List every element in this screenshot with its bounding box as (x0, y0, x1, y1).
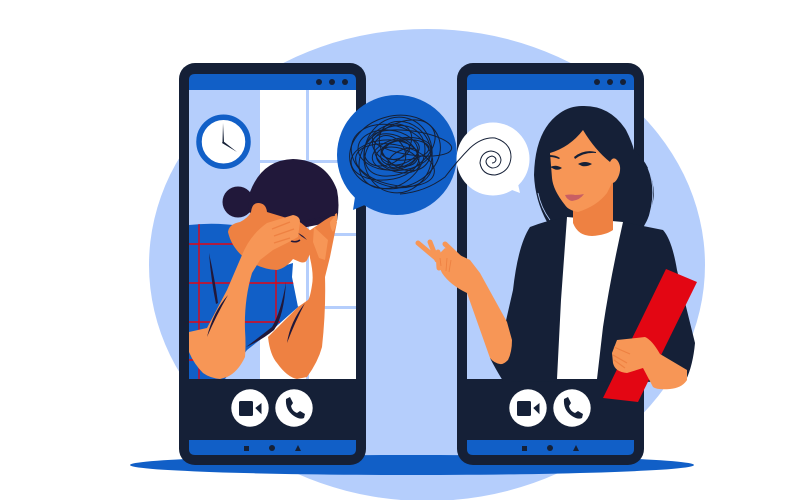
nav icons (244, 445, 301, 451)
person: therapist (418, 106, 697, 402)
finger lines (440, 258, 451, 272)
video button (231, 389, 269, 427)
window (260, 90, 356, 379)
eyes (550, 162, 592, 170)
status dots (316, 79, 348, 85)
ground shadow (130, 455, 694, 475)
call button (553, 389, 591, 427)
white top (557, 217, 623, 379)
gesturing hand (418, 242, 464, 268)
person: distressed woman (189, 159, 338, 379)
finger lines (613, 347, 630, 368)
hair bun (222, 186, 254, 218)
face (228, 203, 312, 270)
lips (565, 194, 584, 201)
phone: right (457, 63, 644, 465)
nav icons (522, 445, 579, 451)
far hand fingers (313, 213, 337, 260)
clothing folds (207, 253, 305, 347)
status dots (594, 79, 626, 85)
far hand (306, 213, 337, 262)
neck (573, 178, 613, 236)
illustration: online therapy video call (130, 29, 705, 500)
folder (603, 269, 697, 402)
hand holding folder (612, 337, 687, 389)
jacket (490, 218, 695, 382)
phone: left (179, 63, 366, 465)
gesturing arm (435, 248, 512, 364)
eyes (298, 233, 307, 240)
clock (199, 117, 248, 166)
background blob (149, 29, 705, 500)
scribble (341, 105, 453, 202)
eyebrows (549, 151, 596, 159)
face (550, 130, 620, 212)
plaid (189, 222, 295, 379)
spiral thread (400, 138, 511, 194)
near arm (189, 215, 300, 379)
hair (248, 159, 338, 228)
video button (509, 389, 547, 427)
finger lines (272, 222, 294, 243)
far arm (268, 222, 337, 379)
speech bubble: calm thoughts (400, 122, 530, 196)
hair highlights (538, 168, 653, 223)
call button (275, 389, 313, 427)
shirt (189, 224, 298, 379)
hair back (534, 106, 654, 235)
speech bubble: tangled thoughts (337, 95, 457, 215)
